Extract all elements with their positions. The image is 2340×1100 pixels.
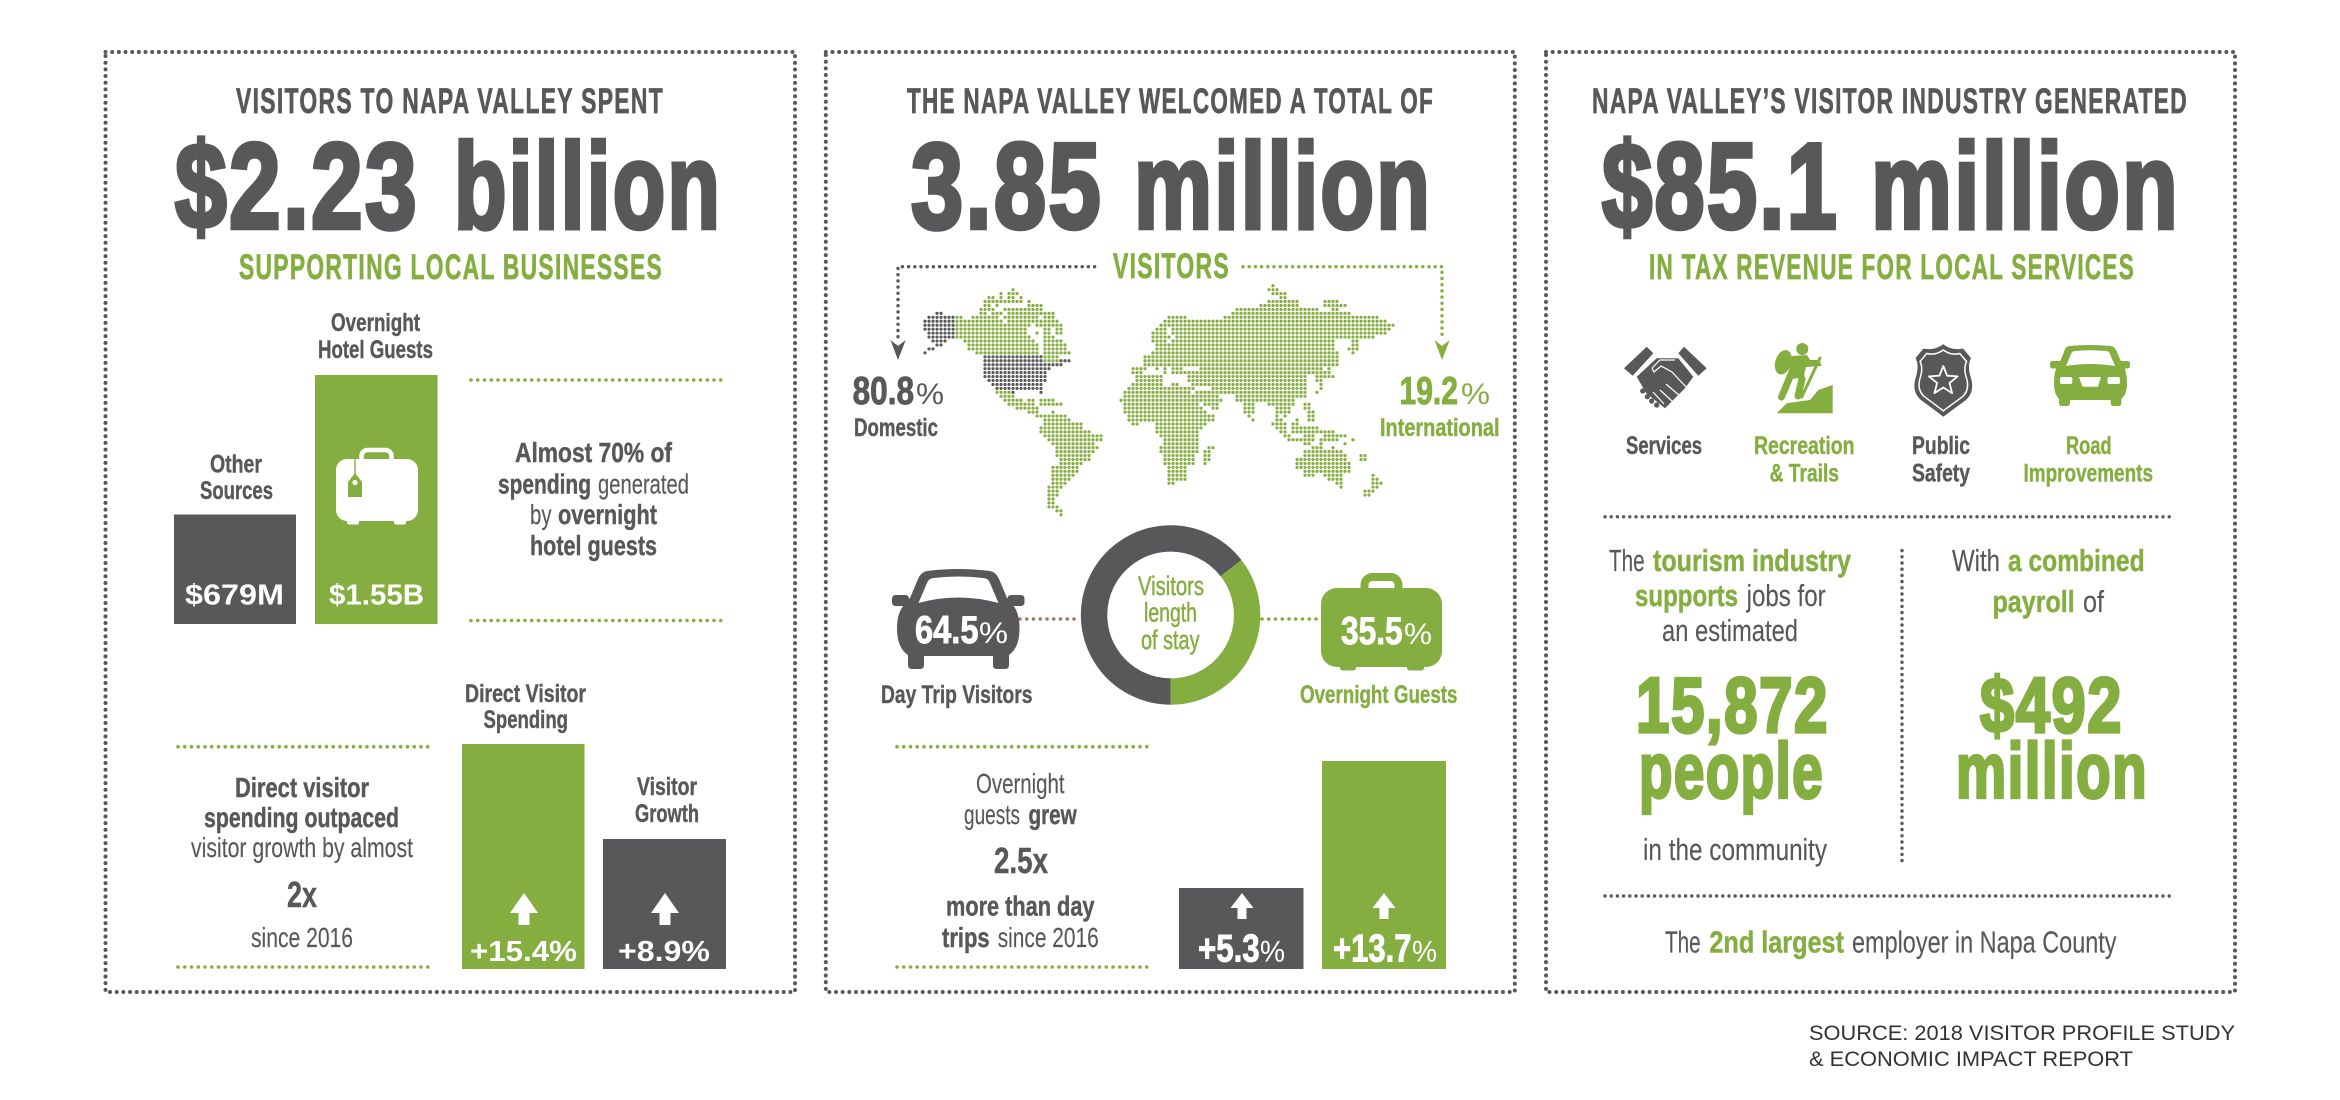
text block: 2nd largest employer: employer in Napa County xyxy=(1852,924,2117,960)
stat block: combined payroll $492 million: million xyxy=(1956,727,2148,815)
stat block: tourism jobs 15,872 people: in the community xyxy=(1643,832,1827,867)
arrow: domestic dotted arrow xyxy=(890,267,1095,360)
stat: 19.2% international: % xyxy=(1461,378,1490,411)
map region: United States (gray) xyxy=(925,313,1069,392)
stat block: tourism jobs 15,872 people: 15,872 xyxy=(1636,661,1829,749)
chart: length of stay donut: length xyxy=(1144,598,1197,628)
stat: 80.8% domestic: Domestic xyxy=(854,414,938,442)
text block: 2nd largest employer xyxy=(1665,924,2117,960)
headline number: 3.85 million: 3.85 xyxy=(911,118,1103,254)
label: recreation and trails: & Trails xyxy=(1770,460,1839,488)
label: public safety: Safety xyxy=(1912,460,1970,488)
bar: day trips +5.3%: % xyxy=(1260,936,1285,969)
label: visitor growth: Visitor xyxy=(637,773,697,801)
text block: almost 70% of spending xyxy=(498,437,689,561)
stat: 80.8% domestic: 80.8 xyxy=(853,370,914,413)
text block: overnight guests grew 2.5x: grew xyxy=(1028,799,1077,830)
label: other sources: Sources xyxy=(200,477,273,505)
headline number: $85.1 million: million xyxy=(1871,118,2180,254)
label: services: Services xyxy=(1626,432,1702,460)
bar: overnight hotel guests $1.55B xyxy=(315,375,438,624)
label: other sources: Other xyxy=(210,450,262,478)
bar: direct visitor spending +15.4%: +15.4% xyxy=(470,936,577,968)
icon: green suitcase with overnight share: 35.5 xyxy=(1341,610,1403,653)
headline number: 3.85 million xyxy=(911,118,1432,254)
text block: overnight guests grew 2.5x: trips xyxy=(942,922,990,953)
subheading: visitors: VISITORS xyxy=(1113,247,1230,286)
text block: overnight guests grew 2.5x: since 2016 xyxy=(998,922,1099,953)
text block: almost 70% of spending: hotel guests xyxy=(530,530,657,561)
label: public safety xyxy=(1912,432,1970,488)
text block: direct visitor spending outpaced: since 2016 xyxy=(251,922,353,953)
chart: length of stay donut xyxy=(1094,538,1247,692)
stat block: tourism jobs 15,872 people xyxy=(1609,543,1852,867)
icon: hiker xyxy=(1772,343,1833,413)
text block: almost 70% of spending: generated xyxy=(598,468,689,500)
icon: gray car with day trip share xyxy=(892,569,1024,669)
bar: day trips +5.3% xyxy=(1179,888,1304,971)
label: road improvements: Road xyxy=(2066,432,2112,460)
stat block: tourism jobs 15,872 people: supports xyxy=(1635,578,1738,613)
stat block: combined payroll $492 million: a combined xyxy=(2008,543,2145,578)
text block: almost 70% of spending: spending xyxy=(498,468,591,500)
stat: 19.2% international: International xyxy=(1380,414,1500,442)
text block: direct visitor spending outpaced: spending outpaced xyxy=(204,802,399,833)
divider: growth block bottom green dots xyxy=(897,965,1152,969)
headline number: $2.23 billion: $2.23 xyxy=(175,118,419,254)
text block: direct visitor spending outpaced: Direct visitor xyxy=(235,772,369,803)
text block: overnight guests grew 2.5x: Overnight xyxy=(976,768,1065,799)
headline number: $85.1 million xyxy=(1602,118,2180,254)
icon: green suitcase with overnight share xyxy=(1321,577,1442,670)
source note: & ECONOMIC IMPACT REPORT xyxy=(1809,1048,2133,1071)
text block: 2nd largest employer: 2nd largest xyxy=(1709,924,1844,960)
bar: other sources $679M: $679M xyxy=(185,580,284,612)
source note: SOURCE: 2018 VISITOR PROFILE STUDY xyxy=(1809,1022,2235,1045)
stat block: tourism jobs 15,872 people: an estimated xyxy=(1662,613,1798,648)
connector: donut to suitcase dots xyxy=(1262,617,1320,621)
bar: visitor growth +8.9%: +8.9% xyxy=(618,936,710,968)
map region: rest of world (green) xyxy=(957,286,1393,515)
divider: bottom green dots xyxy=(471,619,722,622)
chart: dotted world map xyxy=(925,286,1393,515)
stat block: tourism jobs 15,872 people: tourism industry xyxy=(1653,543,1852,578)
icon: gray car with day trip share: 64.5 xyxy=(915,609,978,652)
stat block: tourism jobs 15,872 people: people xyxy=(1639,727,1824,815)
headline number: 3.85 million: million xyxy=(1134,118,1432,254)
chart: length of stay donut: of stay xyxy=(1141,625,1200,655)
text block: almost 70% of spending: overnight xyxy=(558,499,657,530)
bar: day trips +5.3%: +5.3 xyxy=(1198,928,1260,971)
bar: other sources $679M xyxy=(174,514,296,624)
label: public safety: Public xyxy=(1912,432,1970,460)
icon: police badge xyxy=(1914,344,1972,417)
stat block: tourism jobs 15,872 people: jobs for xyxy=(1746,578,1826,613)
label: visitor growth xyxy=(635,773,699,828)
text block: overnight guests grew 2.5x xyxy=(942,768,1099,953)
headline number: $2.23 billion xyxy=(175,118,722,254)
label: recreation and trails: Recreation xyxy=(1754,432,1854,460)
bar: overnight +13.7% xyxy=(1322,761,1446,971)
stat: 19.2% international: 19.2 xyxy=(1400,370,1458,413)
divider: second block top green dots xyxy=(178,745,433,749)
icon: handshake xyxy=(1624,347,1707,408)
text block: 2nd largest employer: The xyxy=(1665,924,1701,960)
heading: welcomed a total of: THE NAPA VALLEY WELCOMED A TOTAL OF xyxy=(907,82,1434,121)
stat block: combined payroll $492 million: of xyxy=(2083,584,2104,619)
icon: green car xyxy=(2050,345,2130,406)
label: road improvements xyxy=(2024,432,2153,488)
label: other sources xyxy=(200,450,273,505)
text block: overnight guests grew 2.5x: guests xyxy=(964,799,1020,830)
heading: visitors spent: VISITORS TO NAPA VALLEY SPENT xyxy=(236,82,664,121)
divider: gray dots below stats xyxy=(1605,894,2173,898)
text block: almost 70% of spending: Almost 70% of xyxy=(515,437,673,468)
label: direct visitor spending xyxy=(465,680,586,734)
divider: second block bottom green dots xyxy=(178,965,433,969)
panel: visitor spending xyxy=(106,52,795,992)
stat block: tourism jobs 15,872 people: The xyxy=(1609,543,1645,578)
text block: direct visitor spending outpaced xyxy=(191,772,413,953)
text block: direct visitor spending outpaced: 2x xyxy=(287,874,317,915)
text block: overnight guests grew 2.5x: more than day xyxy=(946,891,1095,922)
stat block: combined payroll $492 million: $492 xyxy=(1980,661,2123,749)
text block: direct visitor spending outpaced: visitor growth by almost xyxy=(191,832,413,863)
chart: length of stay donut: Visitors xyxy=(1138,571,1204,601)
icon: gray car with day trip share: % xyxy=(979,617,1008,650)
stat block: combined payroll $492 million: With xyxy=(1952,543,2000,578)
label: overnight hotel guests xyxy=(318,309,433,364)
text block: almost 70% of spending: by xyxy=(530,499,552,530)
bar: overnight +13.7%: % xyxy=(1412,936,1437,969)
stat block: combined payroll $492 million xyxy=(1952,543,2148,815)
label: overnight hotel guests: Hotel Guests xyxy=(318,336,433,364)
label: visitor growth: Growth xyxy=(635,800,699,828)
label: recreation and trails xyxy=(1754,432,1854,488)
panel: tax revenue xyxy=(1546,52,2235,992)
connector: car to donut dots xyxy=(1020,617,1080,621)
label: day trip visitors: Day Trip Visitors xyxy=(881,681,1032,709)
label: overnight guests: Overnight Guests xyxy=(1300,681,1458,709)
label: road improvements: Improvements xyxy=(2024,460,2153,488)
subheading: supporting local businesses: SUPPORTING LOCAL BUSINESSES xyxy=(239,248,663,287)
label: direct visitor spending: Direct Visitor xyxy=(465,680,586,708)
panel: visitors welcomed xyxy=(826,52,1515,992)
divider: top green dots xyxy=(471,378,722,382)
divider: growth block top green dots xyxy=(897,745,1152,749)
bar: overnight +13.7%: +13.7 xyxy=(1333,928,1412,971)
icon: white suitcase with tag xyxy=(336,450,418,524)
divider: vertical gray dots xyxy=(1900,551,1904,865)
label: overnight hotel guests: Overnight xyxy=(331,309,420,337)
bar: direct visitor spending +15.4% xyxy=(462,744,584,969)
stat: 80.8% domestic xyxy=(853,370,944,442)
label: direct visitor spending: Spending xyxy=(484,706,568,734)
arrow: international dotted arrow xyxy=(1243,267,1450,360)
stat: 80.8% domestic: % xyxy=(916,378,944,411)
bar: visitor growth +8.9% xyxy=(603,839,726,969)
headline number: $85.1 million: $85.1 xyxy=(1602,118,1839,254)
source note xyxy=(1809,1022,2235,1071)
text block: overnight guests grew 2.5x: 2.5x xyxy=(994,840,1048,881)
icon: green suitcase with overnight share: % xyxy=(1404,618,1432,651)
bar: overnight hotel guests $1.55B: $1.55B xyxy=(329,580,424,612)
stat block: combined payroll $492 million: payroll xyxy=(1992,584,2075,619)
headline number: $2.23 billion: billion xyxy=(454,118,722,254)
stat: 19.2% international xyxy=(1380,370,1500,442)
divider: gray dots above stats xyxy=(1605,515,2173,518)
